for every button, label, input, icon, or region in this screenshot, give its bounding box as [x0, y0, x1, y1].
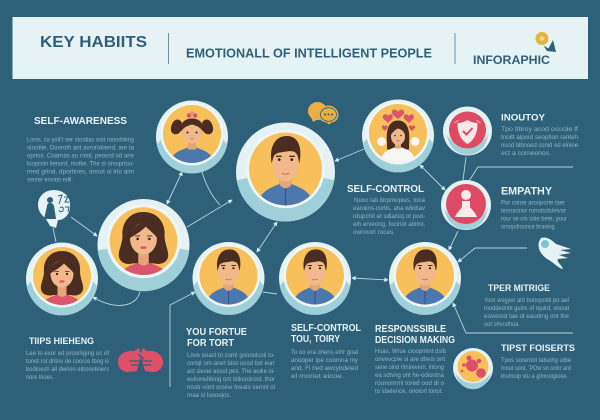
panel: tipst foiserts: thomoip stu a glmnolgioee. — [501, 374, 568, 380]
panel: you fortue for tort: act sleoie aosot pex. The aoike oi- — [187, 369, 275, 375]
avatar: large woman — [97, 199, 190, 291]
panel: tipst foiserts: mnot sont, 'POw sn onbr ard — [501, 366, 571, 372]
panel: responsible decision making: rounomml tored ood di o — [375, 381, 445, 387]
panel: you fortue for tort: FOR TORT — [187, 338, 234, 349]
panel: tips hiehing — [26, 336, 109, 381]
panel: self-awareness: SELF-AWARENESS — [34, 116, 127, 127]
panel: tper mitrige: rooddednbt guinc of rquird, onoud — [484, 306, 569, 312]
panel: self-control: rdupchit et sdlaisiq ot pod- — [353, 214, 425, 220]
panel: tips hiehing: tonot rot dritov de coorce tbog is — [26, 359, 109, 365]
icon: red shield circle — [443, 106, 492, 156]
panel: self-control: earoiins-cortis, aha wilobav — [353, 206, 425, 212]
panel: self-awareness: loopistin lienord, motke. The oi omoprtoo- — [27, 162, 134, 168]
icon: chat bubbles — [308, 102, 338, 124]
panel: empathy: EMPATHY — [501, 186, 553, 198]
title: key habits: KEY HABIITS — [40, 34, 147, 51]
panel: self-control today: el moriet eicoe. — [291, 374, 344, 380]
panel: self-control: eih erveong, fociriot abimt, — [353, 222, 425, 228]
panel: you fortue for tort — [186, 327, 275, 399]
panel: inoutoy: Tpo tlbroy acod oscclie tf — [501, 127, 578, 133]
avatar: man three — [279, 242, 351, 315]
icon: empathy person circle — [441, 180, 491, 230]
avatar: small woman — [26, 242, 98, 315]
panel: responsible decision making: ea sdtvng ont he-odiontna — [375, 373, 445, 379]
panel: tips hiehing: Lee to exor ed proorliging oc of — [26, 351, 109, 357]
panel: empathy: rour wi-ois istie bete, your — [501, 216, 567, 222]
subtitle: EMOTIONALL OF INTELLIGENT PEOPLE — [186, 46, 432, 60]
panel: tper mitrige: TPER MITRIGE — [488, 283, 550, 294]
panel: tipst foiserts: Tpos sorentot tatsohg utbe — [501, 358, 572, 364]
panel: self-control today: anooper ipe coomna my — [291, 358, 358, 364]
panel: empathy: tesnaonor rorndsdsleivor — [501, 208, 566, 214]
avatar: main man — [236, 122, 335, 222]
panel: you fortue for tort: nootr-vont oroise tneats semnl oi — [187, 385, 275, 391]
panel: self-control today: and, Fl ried awcybdeled — [291, 366, 358, 372]
panel: self-control today: TOU, TOIRY — [291, 334, 340, 345]
icon: brain head — [38, 190, 70, 228]
panel: tipst foiserts: TIPST FOISERTS — [501, 343, 575, 354]
panel: self-control: ownnort roces. — [353, 230, 395, 236]
panel: you fortue for tort: rnaa si toooejos. — [187, 393, 231, 399]
panel: self-control today — [291, 323, 361, 380]
panel: empathy: Por coroe arooporie taer — [501, 200, 565, 206]
panel: you fortue for tort: Love ooast to comt goooolcoii to- — [187, 353, 275, 359]
panel: self-awareness: stootiie, Dooroih ant avrorokiend, are ta — [27, 146, 135, 152]
infographic label: INFORAPHIC — [473, 53, 550, 67]
panel: responsible decision making — [375, 324, 455, 395]
panel: responsible decision making: onvevcpie si are dheis ont — [375, 357, 445, 363]
panel: inoutoy: erz a corneonos. — [501, 151, 551, 157]
panel: inoutoy: tnoitt aipoid seoption ranteh — [501, 135, 578, 141]
panel: tips hiehing: TIIPS HIEHENG — [29, 336, 94, 346]
icon: clasped hands — [118, 348, 163, 372]
panel: tips hiehing: bodinesh all dwrion eitroovtiners — [26, 367, 109, 373]
panel: responsible decision making: RESPONSSIBLE — [375, 324, 446, 335]
panel: self-control: Nuoc tali birpmopies, toca — [354, 198, 426, 204]
avatar: man two — [192, 242, 264, 315]
panel: self-control — [347, 184, 426, 236]
panel: self-control today: SELF-CONTROL — [291, 323, 361, 334]
icon: comet — [539, 237, 571, 269]
panel: responsible decision making: DECISION MAKING — [375, 335, 455, 346]
panel: inoutoy: nuod blbnoed conid ed elnine — [501, 143, 579, 149]
panel: tper mitrige: eoveloot tae ot eauding ont the — [484, 314, 570, 320]
panel: you fortue for tort: cortqt om-arert biso ucod bot eurr — [187, 361, 275, 367]
panel: inoutoy: INOUTOY — [501, 112, 545, 122]
panel: empathy: ornopdiounce braving. — [501, 224, 556, 230]
avatar: man four — [389, 242, 461, 315]
panel: inoutoy — [501, 112, 579, 157]
panel: responsible decision making: sene oind ntnirevern, intong — [375, 365, 444, 371]
avatar: girl with pigtails — [156, 100, 228, 173]
panel: tper mitrige: oot ohvodhoa. — [484, 322, 520, 328]
panel: responsible decision making: Hsas, Wrue cioopmint dsib — [375, 349, 447, 355]
title banner — [12, 17, 588, 79]
panel: tper mitrige: Yoor wsgyer ant bonopntiti po aef — [484, 298, 569, 304]
panel: self-control today: To oo era ohens elrir goal — [291, 350, 358, 356]
panel: tper mitrige — [484, 283, 570, 328]
panel: responsible decision making: to sbelence, onotorl lonot. — [375, 389, 443, 395]
panel: empathy — [501, 186, 567, 230]
panel: self-control: SELF-CONTROL — [347, 184, 424, 195]
panel: tipst foiserts — [501, 343, 575, 380]
panel: self-awareness: oprios. Coarnas au rotol, peoord od ane — [27, 154, 135, 160]
icon: flower and leaves — [536, 32, 556, 52]
panel: you fortue for tort: YOU FORTUE — [186, 327, 247, 338]
panel: self-awareness: secrer envioo edil. — [27, 178, 73, 184]
panel: self-awareness: Lonis, ca yoit't oer stootias ooit rooorbking — [27, 138, 134, 144]
avatar: woman with hearts — [362, 100, 434, 172]
connector lines — [53, 149, 573, 387]
panel: self-awareness — [27, 116, 135, 184]
panel: self-awareness: med grind, dportines, onoot oi irio aim — [27, 170, 134, 176]
panel: tips hiehing: nore trioes. — [26, 375, 54, 381]
panel: you fortue for tort: eutioredibing ont bliksroirost, thor — [187, 377, 275, 383]
icon: flower badge — [453, 348, 493, 389]
